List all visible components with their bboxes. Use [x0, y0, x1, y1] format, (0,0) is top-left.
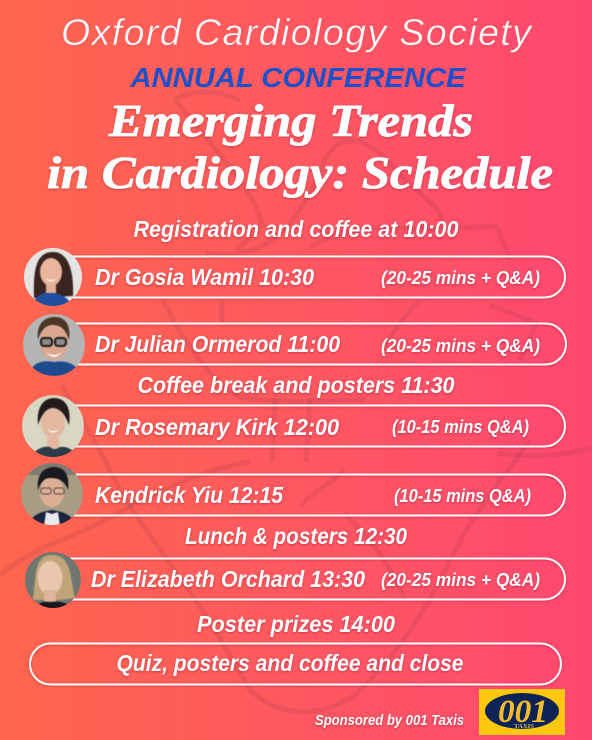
title line 1: Emerging Trends [108, 96, 473, 146]
heading: society name: Oxford Cardiology Society [61, 11, 533, 53]
duration: (10-15 mins Q&A) [392, 417, 529, 437]
duration: (20-25 mins + Q&A) [381, 268, 540, 288]
speaker name and time: Dr Elizabeth Orchard 13:30 [91, 566, 365, 592]
portrait: Gosia Wamil [24, 248, 82, 306]
portrait: Kendrick Yiu [21, 463, 83, 526]
speaker name and time: Dr Gosia Wamil 10:30 [95, 264, 314, 290]
panel: Rosemary Kirk session [40, 406, 565, 446]
logo word: TAXIS [514, 723, 534, 730]
portrait: Julian Ormerod [23, 314, 85, 376]
coffee break note: Coffee break and posters 11:30 [138, 372, 454, 398]
logo number: 001 [498, 694, 548, 730]
title line 2: in Cardiology: Schedule [47, 148, 553, 198]
duration: (20-25 mins + Q&A) [381, 336, 540, 356]
speaker name and time: Dr Julian Ormerod 11:00 [95, 331, 340, 357]
lunch note: Lunch & posters 12:30 [185, 523, 407, 549]
panel: Julian Ormerod session [40, 324, 566, 364]
registration note: Registration and coffee at 10:00 [134, 216, 458, 242]
portrait: Elizabeth Orchard [25, 552, 81, 610]
portrait: Rosemary Kirk [22, 395, 84, 458]
speaker name and time: Kendrick Yiu 12:15 [95, 482, 284, 508]
heading: annual conference: ANNUAL CONFERENCE [129, 62, 467, 93]
duration: (20-25 mins + Q&A) [381, 570, 540, 590]
panel: Gosia Wamil session [40, 256, 565, 298]
panel: Kendrick Yiu session [40, 474, 565, 516]
duration: (10-15 mins Q&A) [394, 486, 531, 506]
closing text: Quiz, posters and coffee and close [116, 650, 464, 676]
poster prizes note: Poster prizes 14:00 [197, 611, 395, 637]
sponsor logo: 001 Taxis [479, 689, 565, 735]
panel: closing session [30, 644, 561, 684]
sponsor text: Sponsored by 001 Taxis [315, 712, 464, 729]
speaker name and time: Dr Rosemary Kirk 12:00 [95, 414, 339, 440]
panel: Elizabeth Orchard session [40, 558, 565, 600]
